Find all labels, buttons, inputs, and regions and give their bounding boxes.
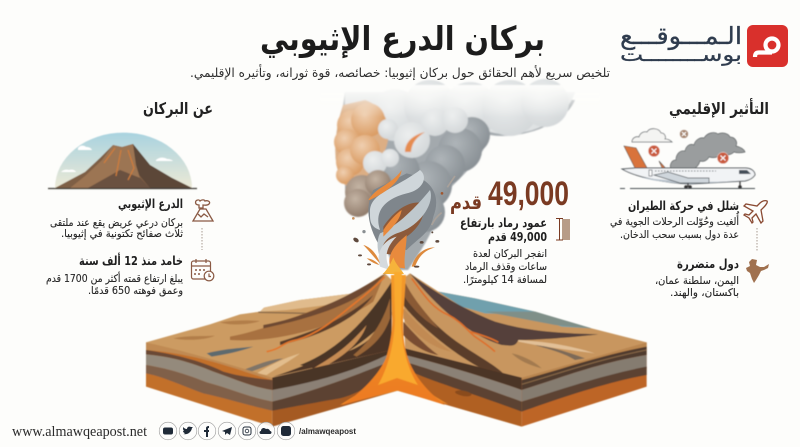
icon: calendar: [192, 259, 214, 281]
panel: about the volcano: [46, 99, 214, 297]
item text: بركان درعي عريض يقع عند ملتقى: [50, 217, 183, 229]
logo wordmark: [620, 22, 742, 66]
upper pale smoke: [345, 92, 575, 134]
top fade: [320, 85, 600, 117]
outer right face: [522, 342, 647, 427]
icon: height bracket: [556, 218, 570, 240]
social icons: [159, 422, 295, 440]
cancelled flight marks: [648, 130, 729, 164]
item: dormant: [46, 252, 214, 297]
callout: ash column height: [450, 175, 570, 286]
ash particles: [352, 192, 443, 268]
big unit: قدم: [450, 190, 482, 214]
callout text: [463, 248, 547, 286]
item: Ethiopian shield: [50, 196, 213, 240]
brown smoke: [344, 170, 391, 217]
mountain illustration: [48, 133, 197, 188]
airplane illustration: [620, 129, 755, 189]
wisps: [432, 176, 455, 225]
inner right face: [395, 342, 522, 427]
swirl and lava fountain: [352, 170, 455, 274]
big number: 49,000: [488, 175, 569, 213]
logo: [620, 22, 788, 67]
plume silhouette: [335, 92, 575, 270]
orange ribbons: [368, 170, 407, 268]
item text: يبلغ ارتفاع قمته أكثر من 1700 قدم: [46, 271, 183, 285]
item title: شلل في حركة الطيران: [628, 198, 739, 213]
item text: عدة دول بسبب سحب الدخان.: [620, 229, 739, 241]
icon: India map: [746, 259, 769, 283]
dark swirl body: [368, 173, 436, 250]
lava conduit: [342, 272, 445, 405]
cross-section volcano block: [146, 272, 647, 427]
social handle: /almawqeapost: [299, 427, 356, 436]
right surface: [403, 273, 647, 378]
left lava stream: [267, 277, 385, 352]
airplane: [622, 146, 755, 189]
right lava stream: [412, 278, 498, 352]
item title: دول متضررة: [677, 256, 739, 271]
lava splashes: [363, 245, 435, 267]
heading: عن البركان: [143, 99, 213, 118]
item text: باكستان، والهند.: [670, 287, 739, 299]
ember core: [383, 203, 424, 257]
footer: [12, 422, 356, 440]
item text: أُلغيت وحُوّلت الرحلات الجوية في: [610, 211, 740, 228]
subtitle: تلخيص سريع لأهم الحقائق حول بركان إثيوبيا: خصائصه، قوة ثورانه، وتأثيره الإقليمي.: [190, 64, 610, 81]
logo mark: [747, 25, 788, 67]
item title: خامد منذ 12 ألف سنة: [79, 252, 183, 268]
outline cloud: [632, 129, 672, 142]
item text: اليمن، سلطنة عمان،: [655, 275, 739, 287]
item text: [46, 271, 183, 297]
pale puffs: [363, 107, 468, 175]
callout text: لمسافة 14 كيلومترًا.: [463, 274, 547, 286]
item text: وعمق فوهته 650 قدمًا.: [88, 285, 183, 297]
smoke cloud: [670, 133, 745, 174]
icon: airplane: [744, 201, 767, 223]
lava fountain: [383, 257, 404, 274]
orange tinted smoke: [335, 100, 389, 190]
title: بركان الدرع الإثيوبي: [260, 19, 545, 59]
callout heading: عمود رماد بارتفاع: [460, 215, 547, 230]
light ribbons: [370, 170, 424, 230]
logo wordmark: الـمـــوقـــع: [620, 22, 742, 50]
callout heading: [460, 215, 547, 245]
item text: [50, 217, 183, 240]
heading: التأثير الإقليمي: [669, 98, 769, 119]
callout text: ساعات وقذف الرماد: [465, 261, 547, 273]
logo wordmark: بوســــــــت: [620, 44, 742, 66]
left surface: [146, 273, 392, 378]
inner left face: [272, 350, 400, 427]
item: air traffic: [610, 198, 767, 241]
right half of block: [395, 273, 647, 427]
website url: www.almawqeapost.net: [12, 424, 148, 440]
callout text: انفجر البركان لعدة: [473, 248, 547, 260]
grey smoke body: [376, 117, 490, 232]
item title: الدرع الإثيوبي: [118, 196, 183, 211]
ash plume illustration: [320, 79, 600, 270]
item: affected countries: [655, 256, 769, 299]
item text: [610, 211, 740, 241]
item text: [655, 275, 739, 299]
icon: volcano: [193, 200, 213, 221]
item text: ثلاث صفائح تكتونية في إثيوبيا.: [61, 228, 183, 240]
left half of block: [146, 273, 400, 427]
panel: regional impact: [610, 98, 769, 299]
outer left face: [146, 342, 272, 427]
callout heading: 49,000 قدم: [488, 229, 547, 245]
